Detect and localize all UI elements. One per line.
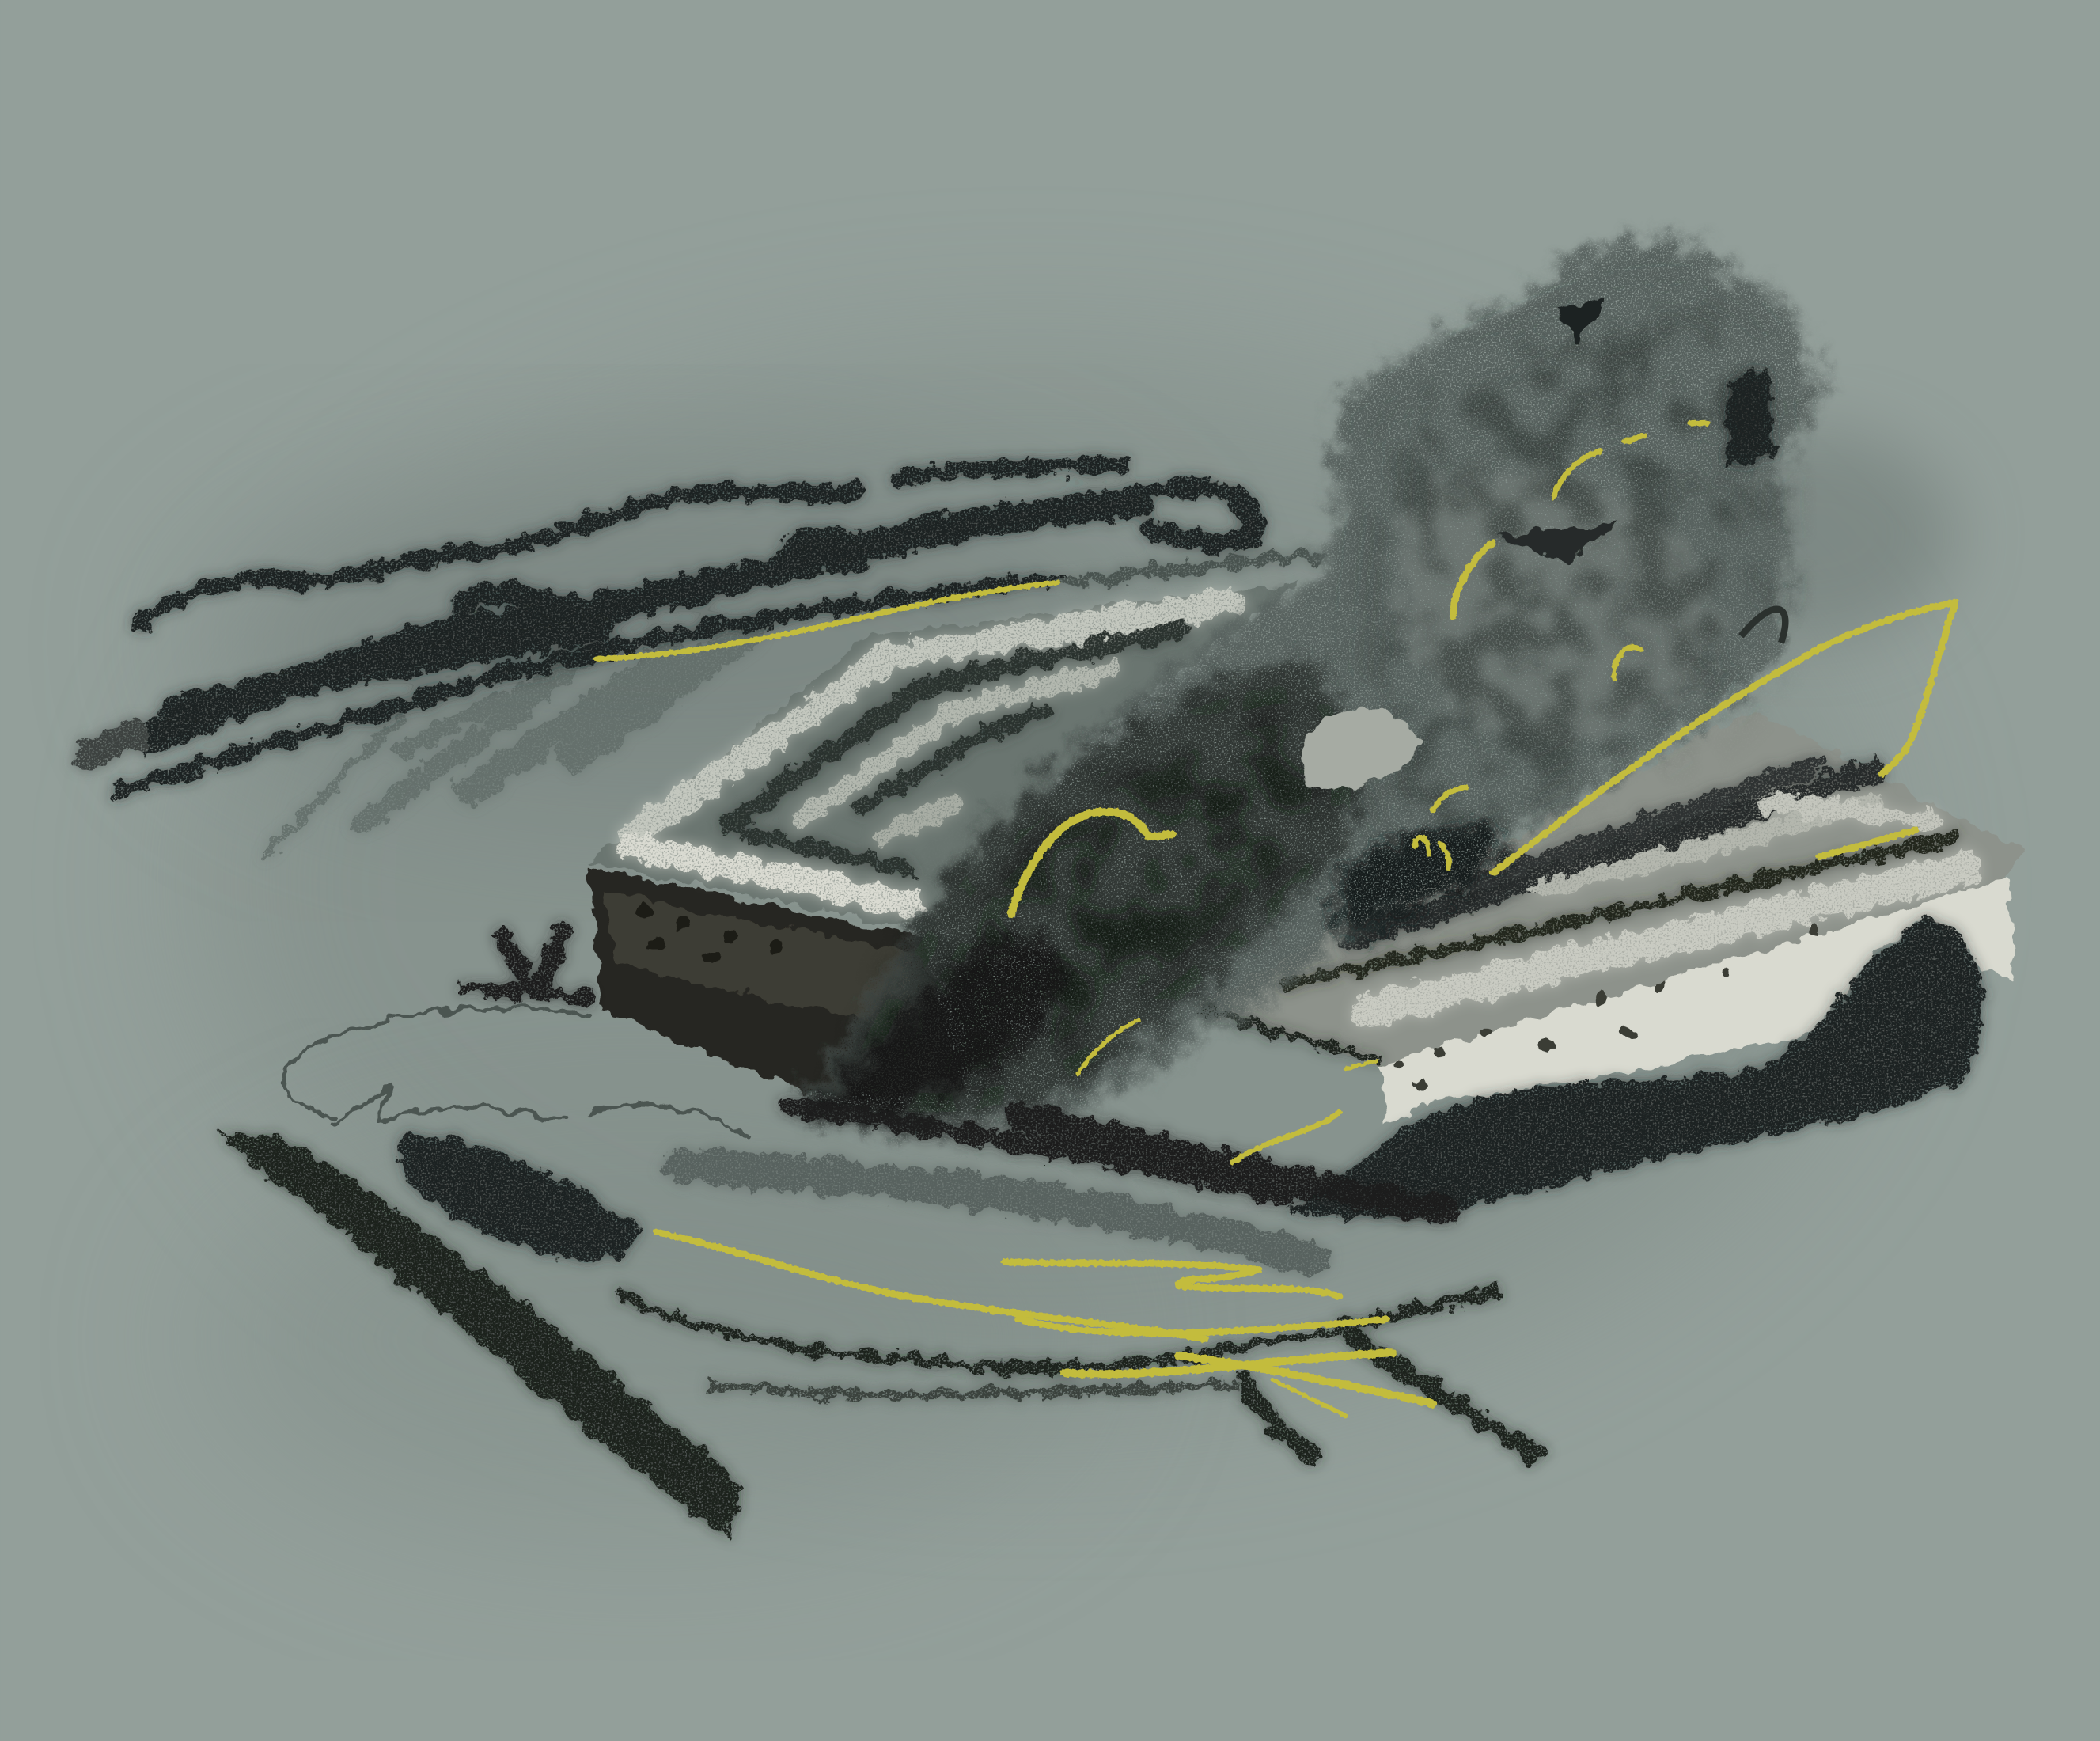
right block roof: [1192, 710, 2022, 1064]
left block front wall: [589, 868, 965, 1098]
lower charcoal sweeps: [619, 1292, 1533, 1453]
thick diagonal charcoal stroke: [221, 1132, 743, 1540]
dark mound below the right block: [1286, 917, 1982, 1217]
sketched outline on the ground: [283, 1007, 750, 1138]
dark scribble blob: [399, 1137, 640, 1260]
right block wall: [1379, 877, 2015, 1125]
background smudges: [188, 362, 1955, 1540]
hatching below the streaks: [261, 629, 750, 859]
left block roof: [589, 582, 1299, 931]
yellow crayon lines: [596, 423, 1955, 1416]
left wind-blown smoke streaks: [89, 464, 1319, 790]
smoke plume: [804, 239, 1817, 1132]
ground debris at the base of the building: [462, 931, 1446, 1259]
